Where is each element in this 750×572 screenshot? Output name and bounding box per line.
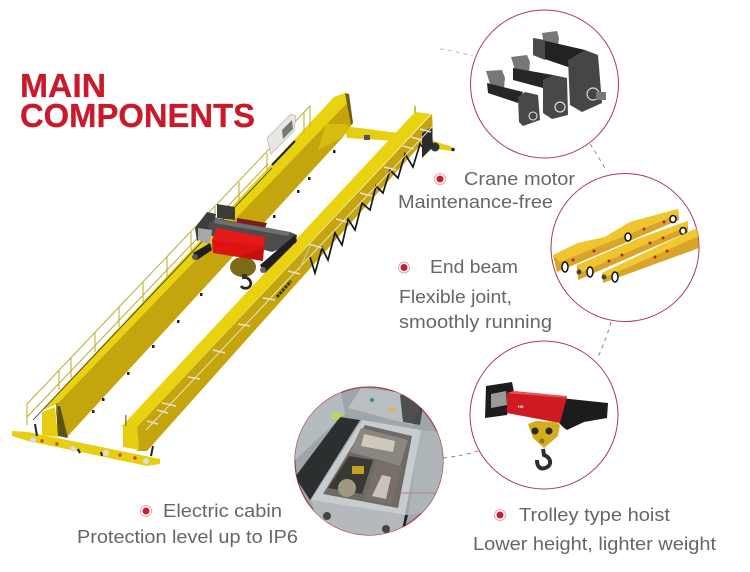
hook xyxy=(537,449,550,468)
label: crane motor: Maintenance-free xyxy=(398,191,553,212)
box front lip xyxy=(311,500,405,535)
left panel with terminals xyxy=(295,387,360,500)
dark stiffeners under left girder xyxy=(92,150,336,413)
far end beam xyxy=(344,126,455,152)
hoist red housing: HS xyxy=(518,404,524,409)
label: crane motor: Crane motor xyxy=(464,168,575,189)
catenary cable zigzag xyxy=(310,127,433,273)
overhead crane illustration xyxy=(12,93,455,466)
control panel on railing xyxy=(267,114,296,165)
back beam xyxy=(553,209,679,272)
label: trolley type hoist: Lower height, lighter weight xyxy=(473,533,716,554)
trolley with red hoist xyxy=(192,204,297,288)
middle beam xyxy=(576,221,688,280)
main open box xyxy=(311,420,436,515)
label: end beam: End beam xyxy=(430,256,518,277)
front beam xyxy=(602,228,699,283)
label: crane motor xyxy=(398,168,575,212)
component circle: end beam xyxy=(551,174,699,322)
bullet xyxy=(434,174,446,184)
hook xyxy=(241,277,251,288)
left girder xyxy=(41,93,353,437)
label: end beam xyxy=(398,256,552,332)
small gear motor xyxy=(486,70,540,126)
near end beam xyxy=(12,403,160,466)
label: end beam: smoothly running xyxy=(399,311,552,332)
bullet xyxy=(494,510,506,520)
label: trolley type hoist xyxy=(473,504,716,554)
component circle: crane motor xyxy=(470,10,618,158)
title xyxy=(20,67,255,134)
label: electric cabin: Electric cabin xyxy=(163,500,282,521)
medium gear motor xyxy=(511,55,568,119)
bullet xyxy=(398,262,410,273)
label: electric cabin: Protection level up to IP6 xyxy=(77,526,298,547)
component circle: electric cabin xyxy=(295,387,445,540)
dashed connector arcs xyxy=(440,49,611,458)
right girder festoon rail xyxy=(146,126,433,430)
hoist black frame xyxy=(485,382,608,430)
title: MAIN xyxy=(20,67,106,104)
yellow hook block xyxy=(528,421,560,448)
top enclosure xyxy=(348,388,425,425)
label: electric cabin xyxy=(77,500,298,547)
right panel xyxy=(408,430,445,515)
large gear motor xyxy=(533,31,606,112)
right girder xyxy=(121,106,433,451)
maker mark on girder xyxy=(277,281,291,297)
label: trolley type hoist: Trolley type hoist xyxy=(519,504,670,525)
left girder walkway railing xyxy=(27,106,310,425)
label: end beam: Flexible joint, xyxy=(399,286,512,307)
component circle: trolley hoist xyxy=(470,341,618,489)
bullet xyxy=(140,506,152,516)
title: COMPONENTS xyxy=(20,97,255,134)
